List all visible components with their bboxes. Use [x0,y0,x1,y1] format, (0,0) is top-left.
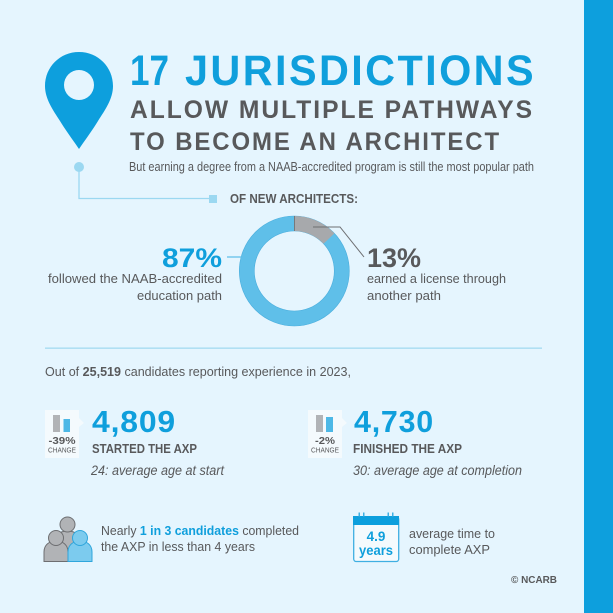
stat: finished the AXP: FINISHED THE AXP [353,442,462,456]
stat: started the AXP: 24: average age at start [90,463,225,478]
stat: 87 percent: education path [137,288,222,303]
stat: 87 percent: followed the NAAB-accredited [48,271,222,286]
title [130,47,536,156]
stat: finished the AXP: 30: average age at completion [353,463,522,478]
stat: started the AXP [90,404,225,478]
change badge: started: -39% [48,435,76,447]
stat: 13 percent: earned a license through [367,271,506,286]
stat: 13 percent [367,243,506,303]
text: one in three candidates: Nearly 1 in 3 candidates completed [101,523,299,538]
change badge: finished: -2% [315,435,336,447]
right accent bar [584,0,613,613]
icon: calendar: years [359,543,393,558]
stat: 13 percent: 13% [367,243,421,273]
icon: people [44,517,92,562]
connector from pin to new architects label [74,162,217,203]
heading: of new architects: OF NEW ARCHITECTS: [230,192,358,206]
title: 17 [130,47,169,95]
change badge: started [45,410,84,458]
text: average time to complete [409,526,495,557]
intro sentence: Out of 25,519 candidates reporting experience in 2023, [45,364,351,379]
title: ALLOW MULTIPLE PATHWAYS [130,96,534,124]
stat: finished the AXP: 4,730 [354,404,434,439]
stat: started the AXP: 4,809 [92,404,176,439]
text: one in three candidates [101,523,299,554]
stat: finished the AXP [353,404,522,478]
change badge: finished: CHANGE [311,448,339,454]
donut chart [227,216,364,326]
stat: 13 percent: another path [367,288,441,303]
change badge: started: CHANGE [48,448,76,454]
title: TO BECOME AN ARCHITECT [130,128,501,156]
stat: 87 percent [48,243,222,303]
text: average time to complete: complete AXP [409,542,490,557]
text: one in three candidates: the AXP in less than 4 years [101,539,255,554]
stat: started the AXP: STARTED THE AXP [92,442,197,456]
copyright: © NCARB [511,574,557,586]
title: JURISDICTIONS [185,47,536,95]
text: average time to complete: average time to [409,526,495,541]
subtitle: But earning a degree from a NAAB-accredited program is still the most popular path [129,160,534,174]
icon: calendar: 4.9 [367,529,385,544]
stat: 87 percent: 87% [162,243,222,273]
icon: map pin [45,52,113,149]
change badge: finished [308,410,347,458]
icon: calendar [353,512,399,562]
